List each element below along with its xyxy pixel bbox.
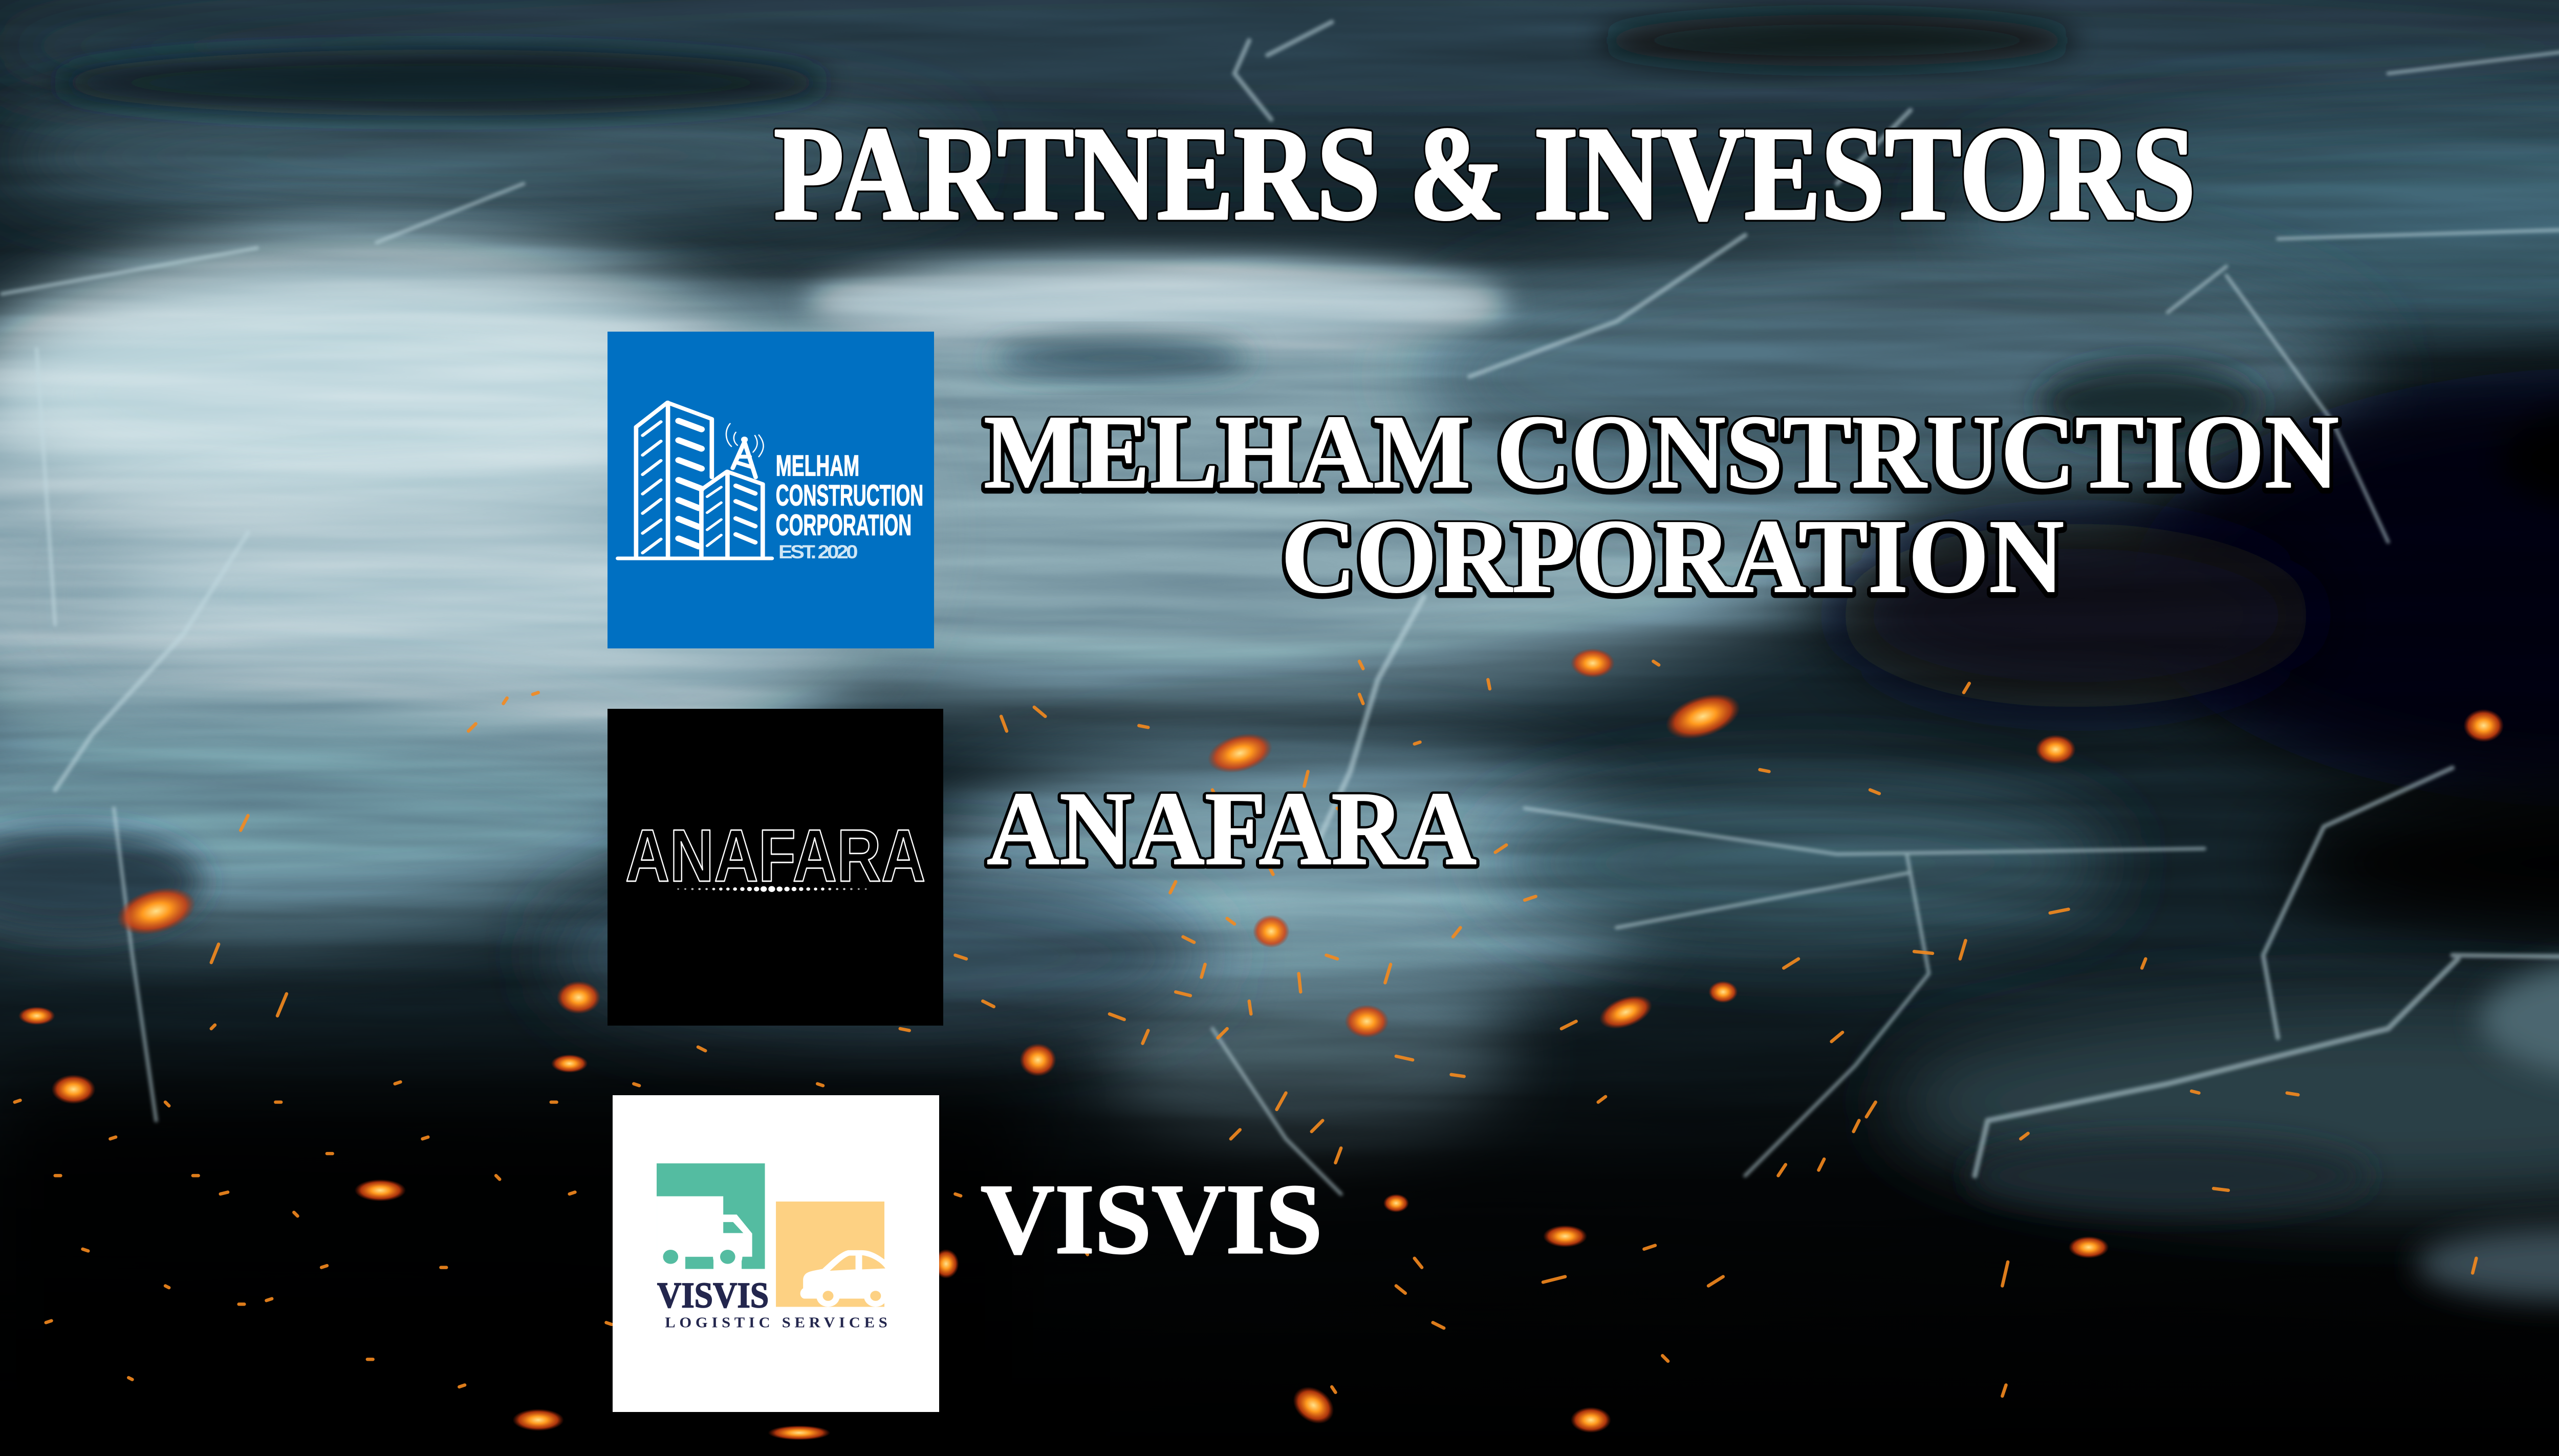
small sparks: [15, 661, 2559, 1396]
partner name: Melham Construction Corporation: [984, 393, 2339, 617]
partner name: Melham Construction Corporation: CORPORATION: [1281, 499, 2064, 617]
logo wordmark: ANAFARA: [625, 814, 925, 897]
logo wordmark: MELHAM: [776, 449, 859, 482]
partner logo: Visvis Logistic Services: [613, 1095, 939, 1412]
logo wordmark: EST. 2020: [778, 541, 858, 562]
partner logo: Anafara: [608, 709, 943, 1026]
partner name: Melham Construction Corporation: MELHAM CONSTRUCTION: [984, 393, 2339, 510]
logo wordmark: LOGISTIC SERVICES: [665, 1315, 887, 1331]
partner name: Melham Construction Corporation: CORPORATION: [1281, 497, 2064, 615]
bottom darkness: [0, 955, 2559, 1456]
icon: car on yellow square: [776, 1202, 887, 1307]
smoke masses: [0, 0, 2559, 1157]
dotted line: [677, 886, 867, 892]
large glowing embers: [18, 606, 2559, 1440]
icon: truck on green square: [656, 1163, 765, 1271]
logo wordmark: [776, 449, 923, 562]
partner name: Melham Construction Corporation: MELHAM CONSTRUCTION: [984, 395, 2339, 512]
partner logo: Melham Construction Corporation: [608, 332, 934, 648]
title: PARTNERS & INVESTORS: [774, 99, 2196, 248]
logo wordmark: CORPORATION: [776, 509, 912, 542]
title: PARTNERS & INVESTORS: [774, 99, 2196, 248]
logo wordmark: VISVIS: [657, 1275, 769, 1315]
partner name: Visvis: VISVIS: [981, 1164, 1322, 1275]
partner name: Anafara: ANAFARA: [987, 771, 1477, 888]
partner name: Anafara: ANAFARA: [987, 770, 1477, 887]
logo wordmark: [657, 1275, 887, 1331]
logo wordmark: CONSTRUCTION: [776, 479, 923, 512]
icon: office buildings and antenna: [618, 403, 772, 558]
